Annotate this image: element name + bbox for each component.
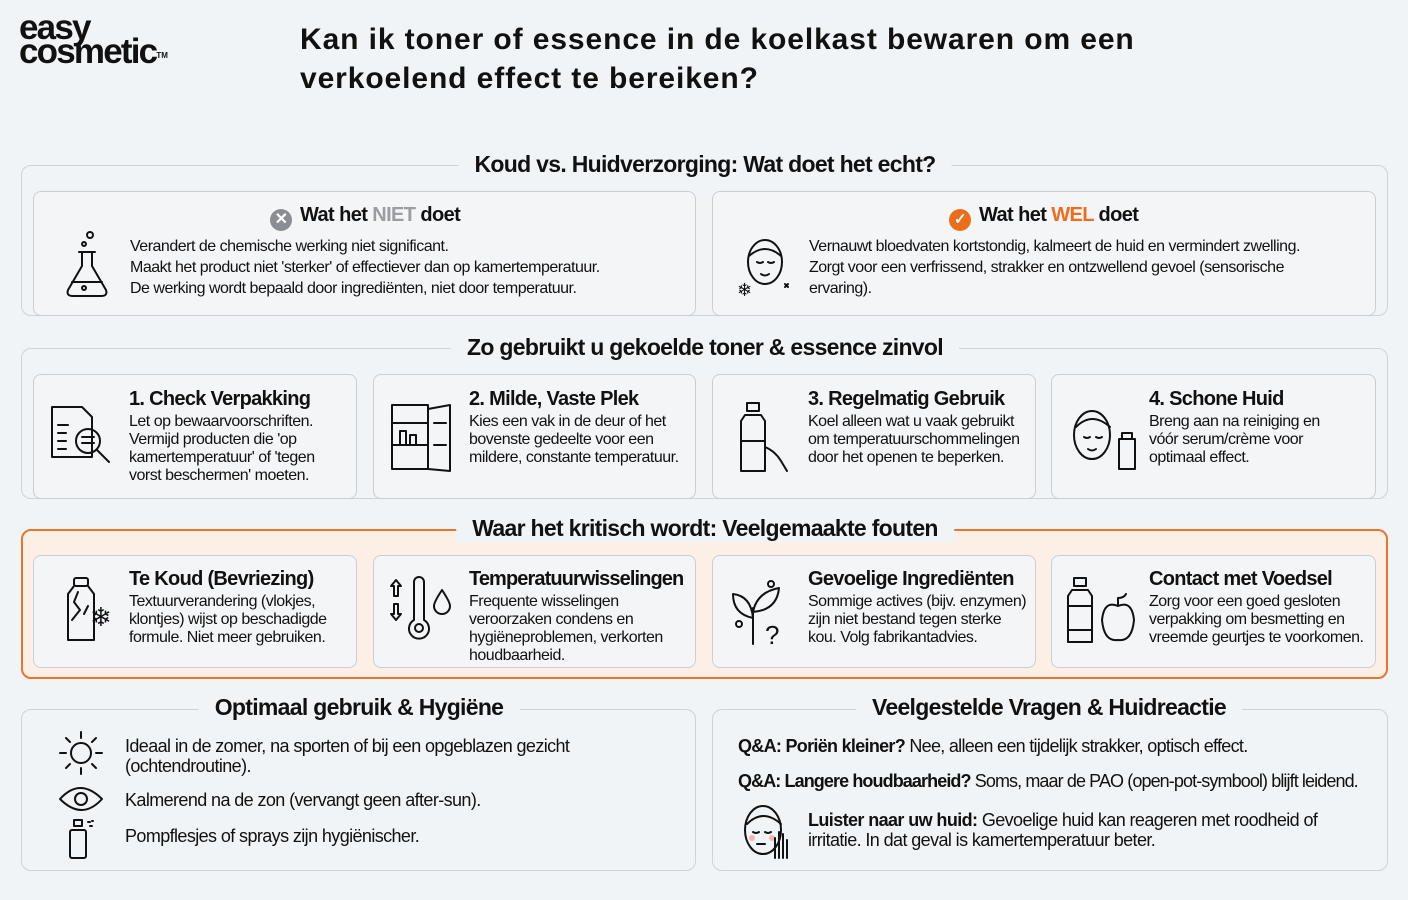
text niet: Verandert de chemische werking niet significant. [130,238,448,255]
icon: frozen bottle: ❄ [90,602,112,632]
section 3: fouten [21,529,1388,679]
card 1 [33,374,357,499]
text contact: Zorg voor een goed gesloten [1149,593,1340,610]
text temperatuurwisselingen: Frequente wisselingen [469,593,619,610]
text contact [1149,568,1363,646]
text luister: irritatie. In dat geval is kamertemperatuur beter. [808,830,1155,850]
text card 3: Koel alleen wat u vaak gebruikt [808,413,1014,430]
text gevoelige: Sommige actives (bijv. enzymen) [808,593,1026,610]
icon: face hand [744,805,788,859]
text gevoelige: Gevoelige Ingrediënten [808,568,1014,590]
icon: frozen bottle [67,577,112,641]
text gevoelige: zijn niet bestand tegen sterke [808,611,1001,628]
text contact: verpakking om besmetting en [1149,611,1344,628]
heading: Koud vs. Huidverzorging: Wat doet het echt? [474,151,936,177]
text te koud: Te Koud (Bevriezing) [129,568,314,590]
text wel [809,238,1300,297]
text card 2: mildere, constante temperatuur. [469,449,679,466]
text luister: Luister naar uw huid: Gevoelige huid kan reageren met roodheid of [808,810,1317,830]
text contact: vreemde geurtjes te voorkomen. [1149,629,1363,646]
card contact voedsel [1051,555,1376,668]
icon: face cold: ❄ [737,280,752,300]
text temperatuurwisselingen [469,568,683,664]
logo: easy [19,8,90,47]
text te koud [129,568,327,646]
text card 1: vorst beschermen' moeten. [129,467,309,484]
card 3 [712,374,1036,499]
card 4 [1051,374,1376,499]
title: verkoelend effect te bereiken? [300,62,759,95]
icon: flask [66,231,108,297]
text temperatuurwisselingen: hygiëneproblemen, verkorten [469,629,663,646]
text zon: Kalmerend na de zon (vervangt geen after-sun). [125,790,481,810]
icon: bottle hand [740,402,788,472]
text temperatuurwisselingen: houdbaarheid. [469,647,565,664]
text te koud: klontjes) wijst op beschadigde [129,611,327,628]
section 4 right: faq [712,709,1388,871]
panel title wel [949,204,1139,231]
text te koud: Textuurverandering (vlokjes, [129,593,315,610]
card temperatuurwisselingen [373,555,696,668]
logo [19,8,168,71]
text card 4: optimaal effect. [1149,449,1249,466]
text card 3 [808,388,1020,466]
panel: wel [712,191,1376,316]
text luister [808,810,1318,850]
text niet: Maakt het product niet 'sterker' of effectiever dan op kamertemperatuur. [130,259,600,276]
panel title wel: Wat het WEL doet [979,204,1138,226]
card te koud [33,555,357,668]
text card 3: om temperatuurschommelingen [808,431,1020,448]
text card 4: vóór serum/crème voor [1149,431,1303,448]
icon: spray [69,819,94,859]
panel: niet [33,191,696,316]
text gevoelige [808,568,1026,646]
section 2: gebruik [21,348,1388,499]
text pompflesjes: Pompflesjes of sprays zijn hygiënischer. [125,826,419,846]
icon: sun [59,731,103,775]
text temperatuurwisselingen: veroorzaken condens en [469,611,633,628]
text card 1: 1. Check Verpakking [129,388,310,410]
text card 2: bovenste gedeelte voor een [469,431,653,448]
text card 4 [1149,388,1320,466]
panel title niet: Wat het NIET doet [300,204,460,226]
text te koud: formule. Niet meer gebruiken. [129,629,325,646]
text zomer [125,736,570,776]
text wel: ervaring). [809,280,872,297]
icon: eye [59,787,103,811]
heading: Zo gebruikt u gekoelde toner & essence zinvol [467,334,943,360]
text card 3: door het openen te beperken. [808,449,1004,466]
panel title wel: ✓ [954,211,966,228]
text niet: De werking wordt bepaald door ingrediënten, niet door temperatuur. [130,280,576,297]
text niet [130,238,600,297]
icon: thermometer [390,576,451,640]
text wel: Zorgt voor een verfrissend, strakker en ontzwellend gevoel (sensorische [809,259,1284,276]
icon: plant question [732,580,780,648]
text card 1: kamertemperatuur' of 'tegen [129,449,315,466]
text card 1 [129,388,315,484]
heading: Waar het kritisch wordt: Veelgemaakte fouten [472,515,938,541]
q1: Q&A: Poriën kleiner? Nee, alleen een tijdelijk strakker, optisch effect. [738,736,1248,756]
section 4 left: optimaal gebruik [21,709,696,871]
text zomer: (ochtendroutine). [125,756,251,776]
icon: fridge [391,404,451,472]
text temperatuurwisselingen: Temperatuurwisselingen [469,568,683,590]
text card 2 [469,388,679,466]
title: Kan ik toner of essence in de koelkast bewaren om een [300,23,1135,56]
text zomer: Ideaal in de zomer, na sporten of bij een opgeblazen gezicht [125,736,569,756]
text contact: Contact met Voedsel [1149,568,1332,590]
text card 2: 2. Milde, Vaste Plek [469,388,638,410]
card gevoelige ingredienten [712,555,1036,668]
text card 3: 3. Regelmatig Gebruik [808,388,1004,410]
text card 1: Vermijd producten die 'op [129,431,297,448]
text card 1: Let op bewaarvoorschriften. [129,413,313,430]
text gevoelige: kou. Volg fabrikantadvies. [808,629,977,646]
panel title niet: ✕ [275,211,287,228]
logo: cosmeticTM [19,32,168,71]
section 1: koud vs huidverzorging [21,165,1388,316]
icon: bottle apple [1067,577,1135,643]
text wel: Vernauwt bloedvaten kortstondig, kalmeert de huid en vermindert zwelling. [809,238,1300,255]
icon: face spray [1073,410,1136,470]
q2: Q&A: Langere houdbaarheid? Soms, maar de PAO (open-pot-symbool) blijft leidend. [738,771,1358,791]
heading: Veelgestelde Vragen & Huidreactie [872,694,1226,720]
title [300,23,1135,95]
text card 2: Kies een vak in de deur of het [469,413,666,430]
text card 4: Breng aan na reiniging en [1149,413,1320,430]
text card 4: 4. Schone Huid [1149,388,1284,410]
card 2 [373,374,696,499]
heading: Optimaal gebruik & Hygiëne [215,694,503,720]
icon: face cold [737,239,789,300]
icon: document magnifier [51,406,110,463]
panel title niet [270,204,461,231]
